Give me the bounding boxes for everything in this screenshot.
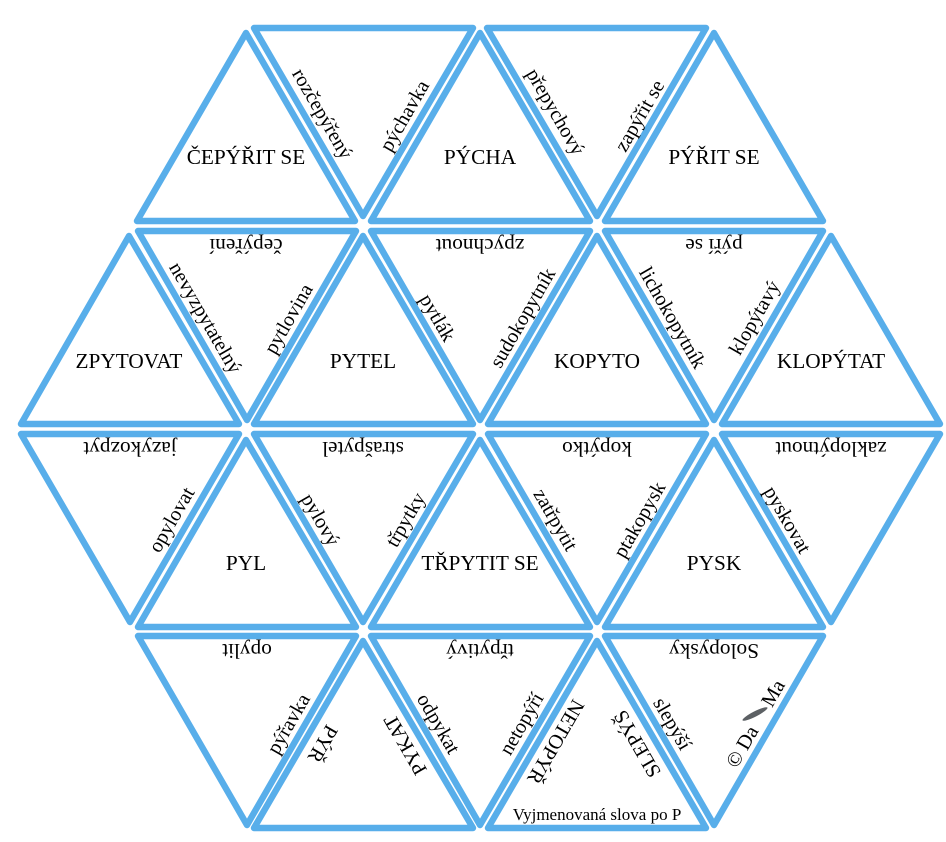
triangle: zpychnout, pytlák, sudokopytník bbox=[371, 231, 590, 420]
triangle: třpytivý, odpykat, netopýří bbox=[371, 636, 590, 825]
triangle: rozčepýřený, pýchavka: pýchavka bbox=[376, 77, 434, 155]
triangle: třpytivý, odpykat, netopýří: odpykat bbox=[412, 690, 464, 758]
triangle: TŘPYTIT SE bbox=[371, 440, 590, 627]
triangle: pýří se, lichokopytník, klopýtavý: pýří se bbox=[685, 234, 743, 258]
triangle: jazykozpyt, opylovat bbox=[21, 434, 239, 622]
triangle: kopýtko, zatřpytit, ptakopysk: zatřpytit bbox=[528, 485, 582, 555]
triangle: jazykozpyt, opylovat: opylovat bbox=[145, 483, 200, 556]
triangle: PÝŘ, PYKAT: PYKAT bbox=[380, 710, 432, 778]
triangle: PYL bbox=[138, 440, 356, 627]
triangle: zaklopýtnout, pyskovat: zaklopýtnout bbox=[775, 437, 887, 461]
triangle: rozčepýřený, pýchavka: rozčepýřený bbox=[287, 65, 357, 164]
triangle: Solopysky, slepýší, copyright bbox=[605, 636, 823, 825]
triangle: PÝCHA: PÝCHA bbox=[444, 145, 517, 169]
triangle: pýří se, lichokopytník, klopýtavý bbox=[605, 231, 823, 420]
triangle: zpychnout, pytlák, sudokopytník: sudokopytník bbox=[486, 264, 561, 372]
triangle: čepýření, nevyzpytatelný, pytlovina: čepýření bbox=[209, 234, 283, 258]
triangle: PÝŘ, PYKAT: PÝŘ bbox=[302, 721, 342, 767]
triangle: Solopysky, slepýší, copyright: © DaMa bbox=[722, 676, 790, 772]
triangle: KLOPÝTAT: KLOPÝTAT bbox=[777, 349, 885, 373]
triangle: zpychnout, pytlák, sudokopytník: zpychnout bbox=[436, 234, 524, 258]
triangle: NETOPÝŘ, SLEPÝŠ, footer: SLEPÝŠ bbox=[608, 706, 666, 782]
triangle: kopýtko, zatřpytit, ptakopysk: ptakopysk bbox=[610, 478, 671, 562]
triangle: KOPYTO: KOPYTO bbox=[554, 349, 640, 373]
triangle: strašpytel, pylový, třpytky: třpytky bbox=[382, 488, 431, 551]
triangle: KOPYTO bbox=[488, 236, 706, 424]
triangle: třpytivý, odpykat, netopýří: třpytivý bbox=[446, 639, 514, 663]
triangle: rozčepýřený, pýchavka bbox=[254, 28, 473, 216]
triangle: kopýtko, zatřpytit, ptakopysk bbox=[488, 434, 706, 622]
triangle: pýří se, lichokopytník, klopýtavý: klopýtavý bbox=[725, 276, 785, 359]
triangle: třpytivý, odpykat, netopýří: netopýří bbox=[495, 689, 549, 759]
triangle: NETOPÝŘ, SLEPÝŠ, footer: NETOPÝŘ bbox=[522, 695, 589, 788]
triangle: zaklopýtnout, pyskovat bbox=[722, 434, 940, 622]
icon: pencil smudge bbox=[741, 705, 769, 723]
triangle: NETOPÝŘ, SLEPÝŠ, footer: Vyjmenovaná slova po P bbox=[513, 805, 681, 824]
triangle: jazykozpyt, opylovat: jazykozpyt bbox=[83, 437, 178, 461]
triangle: čepýření, nevyzpytatelný, pytlovina: pytlovina bbox=[260, 280, 318, 358]
triangle: zpychnout, pytlák, sudokopytník: pytlák bbox=[415, 290, 460, 346]
triangle: NETOPÝŘ, SLEPÝŠ, footer bbox=[488, 641, 706, 828]
triangle: ČEPÝŘIT SE: ČEPÝŘIT SE bbox=[187, 145, 305, 169]
triangle: přepychový, zapýřit se bbox=[487, 28, 706, 216]
triangle: PYSK bbox=[605, 440, 823, 627]
triangle: ZPYTOVAT: ZPYTOVAT bbox=[76, 349, 182, 373]
triangle: ČEPÝŘIT SE bbox=[137, 33, 355, 221]
triangle: PYTEL bbox=[254, 236, 473, 424]
triangle: PÝŘ, PYKAT bbox=[254, 641, 473, 828]
triangle: pýří se, lichokopytník, klopýtavý: lichokopytník bbox=[634, 263, 710, 373]
triangle: PÝŘIT SE bbox=[605, 33, 823, 221]
triangle: TŘPYTIT SE: TŘPYTIT SE bbox=[421, 551, 539, 575]
triangle: Solopysky, slepýší, copyright: slepýší bbox=[648, 694, 696, 754]
triangle: PÝŘIT SE: PÝŘIT SE bbox=[668, 145, 760, 169]
triangle: opylit, pýřavka: pýřavka bbox=[263, 690, 315, 758]
triangle: PYTEL: PYTEL bbox=[330, 349, 396, 373]
triangle: PYL: PYL bbox=[226, 551, 266, 575]
triangle: opylit, pýřavka: opylit bbox=[222, 639, 272, 663]
triangle: PÝCHA bbox=[371, 33, 590, 221]
triangle: kopýtko, zatřpytit, ptakopysk: kopýtko bbox=[562, 437, 632, 461]
triangle: opylit, pýřavka bbox=[138, 636, 356, 825]
triangle: ZPYTOVAT bbox=[21, 236, 239, 424]
triangle: strašpytel, pylový, třpytky: strašpytel bbox=[322, 437, 404, 461]
triangle: čepýření, nevyzpytatelný, pytlovina bbox=[138, 231, 356, 420]
triangle: strašpytel, pylový, třpytky: pylový bbox=[296, 490, 344, 551]
triangle: strašpytel, pylový, třpytky bbox=[254, 434, 473, 622]
triangle: PYSK: PYSK bbox=[687, 551, 742, 575]
triangle: přepychový, zapýřit se: přepychový bbox=[521, 65, 589, 160]
triangle: přepychový, zapýřit se: zapýřit se bbox=[611, 76, 669, 156]
triangle: Solopysky, slepýší, copyright: Solopysky bbox=[669, 639, 759, 663]
triangle: čepýření, nevyzpytatelný, pytlovina: nevyzpytatelný bbox=[164, 259, 246, 378]
triangle: zaklopýtnout, pyskovat: pyskovat bbox=[759, 483, 815, 558]
triangle: KLOPÝTAT bbox=[722, 236, 940, 424]
